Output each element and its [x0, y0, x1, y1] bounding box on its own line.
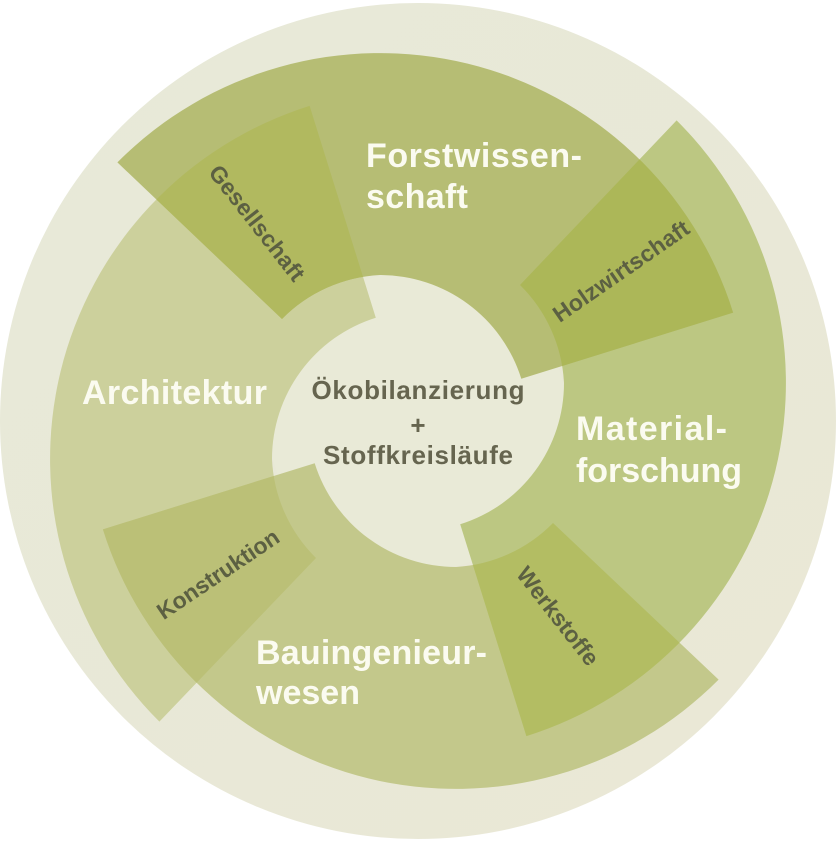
centre text: Stoffkreisläufe — [323, 440, 513, 470]
sector: Materialforschung — [460, 120, 786, 736]
heading: Forstwissenschaft: Forstwissen- — [366, 137, 582, 175]
label: Holzwirtschaft: Holzwirtschaft — [548, 215, 694, 327]
centre text: Ökobilanzierung — [312, 375, 524, 405]
centre hub — [268, 271, 568, 571]
heading: Bauingenieurwesen — [255, 634, 487, 712]
heading: Materialforschung: Material- — [576, 410, 727, 448]
heading: Forstwissenschaft — [366, 137, 582, 216]
sector: Architektur — [50, 106, 376, 722]
centre text — [312, 375, 524, 470]
heading: Forstwissenschaft: schaft — [366, 178, 468, 216]
label: Konstruktion: Konstruktion — [152, 524, 284, 624]
centre text: + — [410, 410, 426, 440]
heading: Bauingenieurwesen: Bauingenieur- — [256, 634, 487, 672]
label: Gesellschaft: Gesellschaft — [204, 160, 311, 286]
overlap: Holzwirtschaft — [520, 160, 733, 366]
label: Werkstoffe: Werkstoffe — [511, 562, 605, 670]
sector: Forstwissenschaft — [117, 53, 733, 379]
overlap: Werkstoffe — [473, 523, 680, 736]
overlap: Konstruktion — [103, 476, 316, 682]
heading: Materialforschung: forschung — [576, 452, 742, 490]
overlap: Gesellschaft — [156, 106, 363, 319]
heading: Bauingenieurwesen: wesen — [255, 674, 360, 712]
sector: Bauingenieurwesen — [103, 463, 719, 789]
heading: Materialforschung — [576, 410, 742, 490]
heading: Architektur: Architektur — [82, 374, 267, 412]
